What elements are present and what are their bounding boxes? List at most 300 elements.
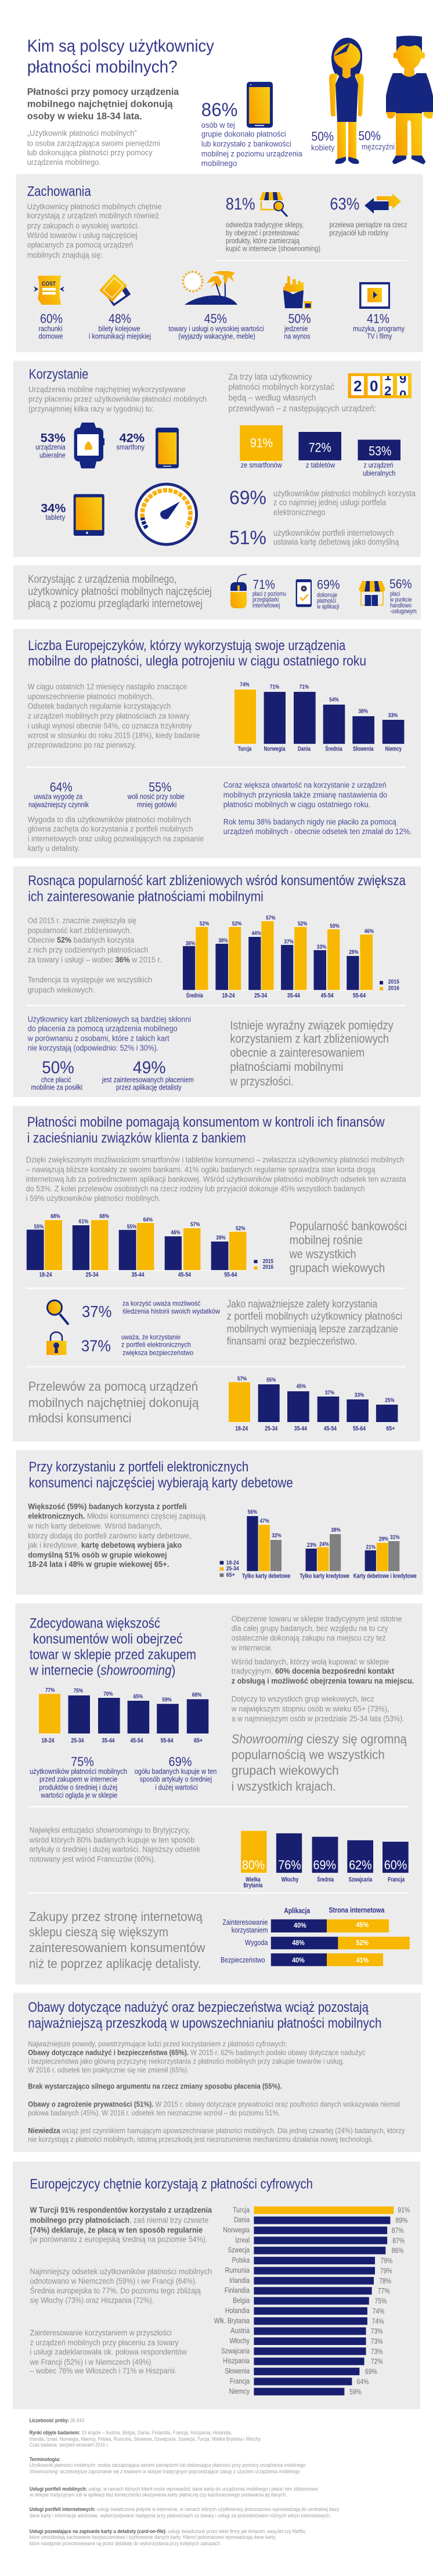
icon: year counter 2020: 0 xyxy=(370,377,378,395)
stat: 51 percent debit default: 51% xyxy=(229,526,266,548)
statement text: korzystaniem z kart zbliżeniowych xyxy=(230,1033,389,1046)
stat: in store 56 percent: 56% xyxy=(389,577,412,591)
chart: card types by age: 31% xyxy=(390,1534,400,1540)
chart: countries bar chart: 38% xyxy=(359,708,368,715)
body text: British enthusiasts: notowany jest wśród Francuzów (60%). xyxy=(30,1855,156,1863)
stat: 69 percent wallet users: elektronicznego xyxy=(273,508,326,518)
body text: lowest usage xyxy=(30,2267,212,2304)
chart: showrooming by country: Włochy xyxy=(282,1876,299,1883)
chart: showrooming by country xyxy=(241,1831,409,1889)
chart: horizontal bars by country: Holandia xyxy=(225,2306,250,2315)
stat: 69 percent xyxy=(135,1754,217,1791)
chart: countries bar chart: Słowenia xyxy=(353,745,374,752)
body text: devices used: (przynajmniej kilka razy w tygodniu) to: xyxy=(28,405,154,413)
stat: 75 percent: produktów o średniej i dużej xyxy=(39,1783,117,1791)
chart: horizontal bars by country: 73% xyxy=(371,2327,383,2336)
chart: horizontal bars by country: Hiszpania xyxy=(223,2357,250,2365)
stat: browser 71 percent xyxy=(252,578,286,609)
chart: contactless by age: 52% xyxy=(298,920,308,927)
stat: smartphones 42 percent: 42% xyxy=(120,432,145,445)
chart: horizontal bars by country: 74% xyxy=(373,2307,385,2315)
stat: 75 percent xyxy=(30,1754,127,1799)
stat: takeaway food: jedzenie xyxy=(284,324,308,333)
stat: 49 percent retailer app: przez aplikację detalisty xyxy=(116,1083,182,1091)
stat: wearables 53 percent: 53% xyxy=(41,432,66,445)
body text: lowest usage: się Włochy (73%) oraz Hiszpania (72%). xyxy=(30,2296,154,2304)
body text: którzy dodają do portfeli zarówno karty debetowe, xyxy=(28,1531,191,1540)
body text: convenience: i internetowych oraz usług pozwalających na zapisanie xyxy=(28,835,204,843)
body text xyxy=(28,917,161,994)
stat: convenience 64 percent: najważniejszy czynnik xyxy=(28,800,89,809)
footnotes: Showrooming: wcześniejsze zapoznanie się z towarem w sklepie tradycyjnym poprzedzające zakup z użyciem urządzenia mobilnego xyxy=(30,2469,300,2475)
chart: card types by age: 21% xyxy=(366,1543,376,1550)
body text: W 2016 r. odsetek ten praktycznie się nie zmienił (65%). xyxy=(28,2066,189,2074)
heading xyxy=(28,638,366,669)
intro text: urządzenia mobilnego. xyxy=(27,158,101,167)
chart: mobile banking by age: 55% xyxy=(127,1223,137,1230)
body text: Dzięki zwiększonym możliwościom smartfonów i tabletów konsumenci – zwłaszcza użytkownicy płatności mobilnych xyxy=(26,1156,404,1164)
stat: app 69 percent: dokonuje xyxy=(317,592,337,599)
stat: 86 percent: grupie dokonało płatności xyxy=(201,130,286,139)
heading: towar w sklepie przed zakupem xyxy=(30,1647,196,1662)
heading xyxy=(28,873,406,904)
body text: devices used: Urządzenia mobilne najchętniej wykorzystywane xyxy=(28,385,186,394)
statement text xyxy=(230,1019,394,1088)
chart: future device use xyxy=(240,425,400,477)
chart: mobile banking by age: 2016 xyxy=(263,1264,273,1271)
chart: app versus website: Wygoda xyxy=(245,1938,268,1947)
intro text: to osoba zarządzająca swoimi pieniędzmi xyxy=(27,139,160,147)
chart: mobile banking by age: 64% xyxy=(143,1216,153,1223)
chart: showrooming by age xyxy=(39,1687,208,1744)
statement text: w przyszłości. xyxy=(230,1075,294,1088)
chart: countries bar chart xyxy=(234,681,404,752)
statement text: młodsi konsumenci xyxy=(28,1411,131,1426)
stat: in store 56 percent: handlowo xyxy=(390,602,412,609)
heading: i zacieśnianiu związków klienta z bankiem xyxy=(27,1130,246,1146)
chart: horizontal bars by country: 72% xyxy=(371,2357,383,2366)
stat: smartphones 42 percent: smartfony xyxy=(116,443,145,452)
panel: Zachowania xyxy=(16,174,423,352)
icon: bill: COST xyxy=(42,281,56,287)
body text: dla całej grupy badanych, bez względu na to czy xyxy=(232,1624,388,1633)
footnotes: Terminologia: xyxy=(30,2456,60,2463)
body text: Odsetek badanych regularnie korzystających xyxy=(28,702,171,710)
body text: domyślną 51% osób w grupie wiekowej xyxy=(28,1551,167,1560)
body text: convenience: Wygoda to dla użytkowników płatności mobilnych xyxy=(28,815,191,824)
chart: card types by age: 18-24 xyxy=(226,1559,239,1566)
icon: smartphone xyxy=(156,428,179,468)
chart: horizontal bars by country: 78% xyxy=(379,2276,391,2285)
body text: Obawy dotyczące nadużyć i bezpieczeństwa (65%). W 2015 r. 62% badanych podało obawy dotyczące nadużyć xyxy=(28,2048,365,2057)
chart: showrooming by country: Wielka xyxy=(246,1876,261,1883)
stat: 69 percent: ogółu badanych kupuje w ten xyxy=(135,1767,217,1776)
statement text xyxy=(29,1909,205,1971)
chart: horizontal bars by country: Turcja xyxy=(233,2205,250,2214)
body text: attitude change: płatności mobilnych w ciągu ostatniego roku. xyxy=(223,800,370,809)
icon: year counter 2020: 0 xyxy=(399,388,406,402)
stat: app 69 percent: 69% xyxy=(317,578,340,592)
heading xyxy=(29,1615,196,1678)
statement text: mobilnej rośnie xyxy=(290,1233,363,1247)
stat: 69 percent wallet users: 69% xyxy=(229,486,266,508)
chart: transfers by age: 25% xyxy=(385,1397,395,1404)
stat: 63 percent transfers: 63% xyxy=(330,195,359,214)
icon: year counter 2020: 9 xyxy=(399,371,406,386)
stat: 63 percent transfers: przyjaciół lub rodziny xyxy=(329,229,389,237)
chart: showrooming by age: 77% xyxy=(45,1687,55,1694)
icon: year counter 2020: 2 xyxy=(384,384,391,398)
stat: women: kobiety xyxy=(311,143,335,152)
footnotes: Użytkownik płatności mobilnych: osoba zarządzająca swoimi pieniędzmi lub dokonująca płatności przy pomocy urządzenia mobilnego xyxy=(30,2462,305,2469)
body text: Obawy o zagrożenie prywatności (51%). W 2015 r. obawy dotyczące prywatności oraz poufności danych wskazywała niemal xyxy=(28,2100,400,2108)
intro text xyxy=(27,129,160,167)
panel: Europeans and digital payments xyxy=(13,2162,420,2409)
heading xyxy=(28,2000,381,2031)
chart: mobile banking by age: 61% xyxy=(79,1218,89,1225)
body text: za towary i usługi – wobec 36% w 2015 r. xyxy=(28,955,161,964)
chart: transfers by age: 35-44 xyxy=(294,1425,307,1432)
stat: in store 56 percent: płaci xyxy=(390,591,400,598)
stat: 81 percent showrooming xyxy=(226,195,320,253)
stat: 75 percent: wartości ogląda je w sklepie xyxy=(40,1791,117,1799)
body text: internetową lub za pośrednictwem aplikacji bankowej. Wśród użytkowników płatności mobilnych odsetek ten wzrasta xyxy=(26,1175,406,1184)
chart: countries bar chart: Niemcy xyxy=(385,745,402,752)
chart: contactless by age: 55-64 xyxy=(353,992,366,999)
body text: w nich karty debetowe. Wśród badanych, xyxy=(27,1522,162,1531)
title: płatności mobilnych? xyxy=(27,57,178,77)
statement text: mobilnych wymieniają lepsze zarządzanie xyxy=(227,1322,398,1334)
statement text: Showrooming cieszy się ogromną xyxy=(232,1731,407,1746)
chart: contactless by age: 33% xyxy=(317,943,327,950)
body text: convenience: karty u detalisty. xyxy=(28,844,80,853)
stat: men: mężczyźni xyxy=(362,143,395,151)
statement text: obecnie a zainteresowaniem xyxy=(230,1047,365,1060)
body text: Wśród badanych, którzy wolą kupować w sklepie xyxy=(232,1657,389,1666)
chart: horizontal bars by country: 74% xyxy=(372,2317,384,2325)
chart: card types by age: 47% xyxy=(260,1517,269,1524)
heading xyxy=(27,1114,385,1146)
chart: contactless by age: 37% xyxy=(284,938,294,945)
icon: bill xyxy=(34,276,64,305)
chart: horizontal bars by country: Słowenia xyxy=(225,2366,250,2375)
body text: Turkey: W Turcji 91% respondentów korzystało z urządzenia xyxy=(30,2206,212,2214)
chart: horizontal bars by country: 86% xyxy=(392,2246,404,2255)
icon: film xyxy=(359,282,390,309)
chart: showrooming by country: 62% xyxy=(349,1858,372,1873)
panel: intro who are Polish mobile payment users xyxy=(27,36,433,168)
chart: future device use: 53% xyxy=(369,444,391,459)
subheading: osoby w wieku 18-34 lata. xyxy=(27,111,142,122)
chart: transfers by age: 55-64 xyxy=(353,1425,366,1432)
body text: Obecnie 52% badanych korzysta xyxy=(28,936,135,944)
body text: upowszechnienie płatności mobilnych. xyxy=(28,692,154,701)
chart: showrooming by country: 60% xyxy=(384,1858,407,1873)
body text: – nawiązują bliższe kontakty ze swoimi bankami. 41% ogółu badanych regularnie sprawdza stan konta drogą xyxy=(26,1166,376,1174)
chart: countries bar chart: 33% xyxy=(388,712,398,719)
chart: app versus website: Aplikacja xyxy=(284,1906,311,1915)
body text: i usługi wynosi obecnie 54%, co oznacza trzykrotny xyxy=(28,721,192,730)
footnotes: Usługi pozwalające na zapisanie karty u detalisty (card-on-file): usługi świadczone przez takie firmy jak Amazon, easyJet czy Netflix, xyxy=(30,2528,306,2535)
body text: Najważniejsze powody, powstrzymujące ludzi przed korzystaniem z płatności cyfrowych: xyxy=(28,2040,287,2048)
chart: transfers by age: 33% xyxy=(355,1391,365,1398)
body text: lowest usage: Najmniejszy odsetek użytkowników płatności mobilnych xyxy=(30,2267,212,2276)
stat: holidays and furniture xyxy=(168,312,264,341)
stat: 81 percent showrooming: by obejrzeć i przetestować xyxy=(226,229,300,237)
chart: contactless by age xyxy=(183,914,399,999)
chart: horizontal bars by country: Dania xyxy=(234,2216,250,2224)
stat: 86 percent: lub korzystało z bankowości xyxy=(201,139,291,148)
chart: card types by age: 32% xyxy=(272,1532,282,1539)
chart: transfers by age: 25-34 xyxy=(265,1425,278,1432)
body text: three years forecast: przewidywań – z następujących urządzeń: xyxy=(229,405,376,414)
stat: 63 percent transfers: przelewa pieniądze na rzecz xyxy=(329,221,407,229)
chart: card types by age: 29% xyxy=(379,1535,389,1542)
chart: app versus website: Bezpieczeństwo xyxy=(221,1956,265,1964)
chart: showrooming by age: 59% xyxy=(162,1696,172,1703)
stat: 50 percent meals: 50% xyxy=(42,1058,74,1077)
chart: countries bar chart: 71% xyxy=(270,683,280,690)
stat: music, TV and films: 41% xyxy=(367,312,389,326)
icon: fries xyxy=(283,276,312,308)
stat: tickets xyxy=(89,312,151,341)
body text xyxy=(27,203,161,259)
stat: less cash 55 percent: woli nosić przy sobie xyxy=(127,792,185,801)
panel: Korzystanie xyxy=(13,361,421,557)
chart: app versus website: Zainteresowanie xyxy=(222,1918,268,1926)
body text: połowa badanych (45%). W 2016 r. odsetek ten nieznacznie wzrósł – do poziomu 51%. xyxy=(28,2109,280,2117)
stat: bills: 60% xyxy=(40,312,63,326)
body text: attitude change xyxy=(223,781,412,836)
body text: i 59% użytkowników płatności mobilnych. xyxy=(26,1194,161,1203)
stat: 86 percent: mobilnego xyxy=(201,159,237,168)
stat: 86 percent: osób w tej xyxy=(201,121,235,129)
chart: contactless by age: 2016 xyxy=(388,985,399,992)
chart: contactless by age: 52% xyxy=(200,920,210,927)
chart: horizontal bars by country: Francja xyxy=(230,2376,250,2385)
statement text: Korzystając z urządzenia mobilnego, xyxy=(28,573,176,586)
footnotes: w sklepie tradycyjnym lub w aplikacji bez konieczności okazywania karty płatniczej czy każdorazowego podawania jej danych. xyxy=(30,2492,287,2498)
statement text: płacą z poziomu przeglądarki internetowej xyxy=(28,598,203,610)
panel: fraud and security concerns xyxy=(13,1993,421,2152)
stat: less cash 55 percent xyxy=(127,780,185,809)
chart: showrooming by country: Brytania xyxy=(244,1882,263,1889)
body text: card users: do płacenia za pomocą urządzenia mobilnego xyxy=(28,1024,178,1033)
body text: British enthusiasts: artykuły o średniej i dużej wartości. Najniższy odsetek xyxy=(30,1845,200,1854)
stat: browser 71 percent: przeglądarki xyxy=(252,597,279,604)
chart: card types by age: 38% xyxy=(331,1527,341,1534)
icon: padlock xyxy=(46,1332,67,1355)
chart: horizontal bars by country xyxy=(214,2205,410,2396)
stat: security 37 percent xyxy=(81,1333,193,1356)
footnotes: Liczebność próby: 36 843 xyxy=(30,2418,84,2424)
stat: holidays and furniture: (wyjazdy wakacyjne, meble) xyxy=(178,332,255,341)
statement text: z portfeli mobilnych użytkownicy płatności xyxy=(227,1310,402,1322)
chart: showrooming by country: Średnia xyxy=(317,1875,334,1883)
stat: 50 percent meals: chce płacić xyxy=(41,1075,71,1084)
stat: wearables 53 percent: ubieralne xyxy=(39,451,66,460)
body text: lowest usage: Średnia europejska to 77%. Do poziomu tego zbliżają xyxy=(30,2286,201,2295)
body text: i bezpieczeństwa jako główną przyczynę niekorzystania z płatności mobilnych przy zakupie towarów i usług. xyxy=(28,2057,344,2065)
body text: z urządzeń mobilnych przy płatnościach za towary xyxy=(28,712,190,720)
stat: app 69 percent xyxy=(316,578,340,611)
chart: mobile banking by age: 2015 xyxy=(263,1258,273,1265)
chart: horizontal bars by country: 77% xyxy=(378,2286,390,2295)
stat: women xyxy=(311,129,335,152)
body text: Turkey: mobilnego przy płatnościach, zaś niemal trzy czwarte xyxy=(30,2216,208,2224)
chart: horizontal bars by country: Izreal xyxy=(235,2235,250,2244)
stat: women: 50% xyxy=(311,129,334,144)
footnotes: które następnie przechowywane są przez detalistę do wykorzystania przy kolejnych zakupach. xyxy=(30,2541,221,2547)
body text: devices used xyxy=(28,385,207,413)
heading: najważniejszą przeszkodą w upowszechnianiu płatności mobilnych xyxy=(28,2015,381,2031)
statement text: mobilnych najchętniej dokonują xyxy=(28,1395,199,1410)
intro text: lub dokonująca płatności przy pomocy xyxy=(27,149,153,157)
stat: tracking spending 37 percent xyxy=(82,1299,220,1321)
stat: 49 percent retailer app: 49% xyxy=(133,1058,166,1077)
body text: Brak wystarczająco silnego argumentu na rzecz zmiany sposobu płacenia (55%). xyxy=(28,2082,282,2090)
statement text xyxy=(289,1220,407,1275)
stat: security 37 percent: uważa, że korzystanie xyxy=(121,1333,181,1341)
chart: future device use: 72% xyxy=(309,440,331,454)
statement text xyxy=(227,1297,402,1347)
chart: horizontal bars by country: 87% xyxy=(392,2226,404,2235)
chart: horizontal bars by country: 87% xyxy=(392,2236,405,2245)
icon: year counter 2020 xyxy=(348,373,412,398)
stat: convenience 64 percent: 64% xyxy=(50,780,73,794)
stat: 75 percent: 75% xyxy=(71,1754,94,1769)
body text: British enthusiasts xyxy=(29,1825,200,1863)
stat: security 37 percent: 37% xyxy=(81,1337,111,1355)
stat: 75 percent: przed zakupem w internecie xyxy=(39,1774,117,1783)
stat: tablets 34 percent xyxy=(41,502,66,522)
stat: security 37 percent: zwiększa bezpieczeństwo xyxy=(122,1348,193,1356)
body text: Turkey xyxy=(30,2206,212,2243)
heading: Europejczycy chętnie korzystają z płatności cyfrowych xyxy=(30,2177,313,2192)
chart: horizontal bars by country: Irlandia xyxy=(229,2276,250,2285)
chart: showrooming by country: 80% xyxy=(242,1858,265,1873)
chart: horizontal bars by country: Włochy xyxy=(229,2336,250,2345)
statement text: popularnością we wszystkich xyxy=(232,1747,385,1762)
chart: app versus website: 48% xyxy=(292,1939,305,1947)
body text: grupach wiekowych. xyxy=(28,986,95,994)
stat: 81 percent showrooming: 81% xyxy=(226,195,255,214)
chart: mobile banking by age: 68% xyxy=(50,1213,60,1220)
body text xyxy=(26,1156,406,1203)
chart: contactless by age: 38% xyxy=(218,937,228,944)
body text: card users: Użytkownicy kart zbliżeniowych są bardziej skłonni xyxy=(28,1015,191,1024)
stat: browser 71 percent: 71% xyxy=(252,578,275,592)
chart: showrooming by age: 70% xyxy=(103,1690,113,1697)
icon: phone with check xyxy=(296,579,312,607)
chart: countries bar chart: Dania xyxy=(298,745,311,752)
footnotes: dane karty i informacje adresowe, wykorzystywane następnie przy płatnościach za towary i usługi za pośrednictwem różnych witryn internetowych. xyxy=(30,2513,331,2519)
subheading xyxy=(27,86,179,122)
body text: W ciągu ostatnich 12 miesięcy nastąpiło znaczące xyxy=(28,683,187,691)
chart: contactless by age: 44% xyxy=(252,930,261,937)
stat: smartphones 42 percent xyxy=(116,432,145,452)
chart: mobile banking by age: 46% xyxy=(171,1229,181,1236)
chart: showrooming by age: 25-34 xyxy=(71,1737,84,1744)
chart: countries bar chart: 71% xyxy=(300,683,309,690)
chart: contactless by age: 57% xyxy=(266,914,276,921)
body text: do 53%. Z kolei przelewów osobistych na rzecz rodziny lub przyjaciół dokonuje 45% wszystkich badanych xyxy=(26,1185,365,1193)
chart: app versus website: 41% xyxy=(356,1956,369,1964)
chart: mobile banking by age: 35-44 xyxy=(131,1271,145,1278)
chart: showrooming by age: 55-64 xyxy=(161,1737,174,1744)
chart: horizontal bars by country: 64% xyxy=(357,2377,369,2386)
stat: 50 percent meals: mobilnie za posiłki xyxy=(31,1083,82,1091)
icon: tickets xyxy=(99,274,131,306)
stat: tickets: bilety kolejowe xyxy=(99,324,140,333)
icon: man xyxy=(386,36,433,164)
body text: Tendencja ta występuje we wszystkich xyxy=(28,976,152,984)
chart: card types by age: Tylko karty debetowe xyxy=(242,1572,290,1579)
stat: 81 percent showrooming: kupić w internecie (showrooming) xyxy=(226,244,320,253)
chart: horizontal bars by country: Rumunia xyxy=(225,2266,250,2274)
stat: tracking spending 37 percent: śledzenia historii swoich wydatków xyxy=(122,1307,220,1315)
chart: showrooming by age: 65% xyxy=(133,1693,143,1700)
chart: card types by age: 25-34 xyxy=(226,1565,239,1572)
footnotes: które umożliwiają zachowanie bezpieczeństwa i szyfrowanie danych karty. Klienci jednorazowo wprowadzają dane karty, xyxy=(30,2534,276,2541)
chart: contactless by age: 52% xyxy=(232,920,242,927)
statement text: niż te poprzez aplikację detalisty. xyxy=(29,1957,201,1971)
stat: 81 percent showrooming: odwiedza tradycyjne sklepy, xyxy=(226,221,304,229)
chart: mobile banking by age xyxy=(27,1213,273,1278)
heading: Przy korzystaniu z portfeli elektronicznych xyxy=(29,1459,248,1475)
chart: card types by age xyxy=(220,1509,417,1579)
chart: countries bar chart: Turcja xyxy=(238,745,252,752)
body text: Niewiedza wciąż jest czynnikiem hamującym upowszechnianie płatności mobilnych. Dla jednej czwartej (24%) badanych, którzy xyxy=(28,2127,405,2135)
body text: z nich przy codziennych płatnościach xyxy=(28,946,148,954)
icon: smartwatch xyxy=(74,423,104,468)
body text: Turkey: (w porównaniu z europejską średnią na poziomie 54%). xyxy=(30,2235,207,2243)
stat: holidays and furniture: towary i usługi o wysokiej wartości xyxy=(168,324,264,333)
stat: holidays and furniture: 45% xyxy=(204,312,227,326)
chart: horizontal bars by country: Polska xyxy=(232,2256,250,2264)
stat: less cash 55 percent: 55% xyxy=(149,780,171,794)
body text: elektronicznych. Młodsi konsumenci częściej zapisują xyxy=(28,1512,206,1521)
chart: contactless by age: 36% xyxy=(186,940,196,947)
chart: app versus website: 52% xyxy=(356,1939,369,1947)
body text: 18-24 lata i 48% w grupie wiekowej 65+. xyxy=(28,1560,169,1569)
chart: horizontal bars by country: 89% xyxy=(396,2216,408,2225)
chart: horizontal bars by country: 79% xyxy=(381,2256,393,2265)
body text: three years forecast xyxy=(229,373,376,414)
body text: three years forecast: płatności mobilnych korzystać xyxy=(229,383,334,392)
body text: Użytkownicy płatności mobilnych chętnie xyxy=(27,203,161,211)
chart: mobile banking by age: 39% xyxy=(216,1234,226,1241)
heading: Liczba Europejczyków, którzy wykorzystują swoje urządzenia xyxy=(28,638,346,654)
statement text xyxy=(28,1379,199,1426)
chart: contactless by age: Średnia xyxy=(186,991,203,999)
body text: card users xyxy=(27,1015,191,1052)
chart: transfers by age: 55% xyxy=(266,1376,276,1383)
stat: 69 percent wallet users xyxy=(229,486,416,518)
footnotes: Irlandia, Izrael, Norwegia, Niemcy, Polska, Rumunia, Słowenia, Szwajcaria, Szwecja, Turcja, Wielka Brytania i Włochy. xyxy=(30,2436,261,2442)
stat: 69 percent wallet users: użytkowników płatności mobilnych korzysta xyxy=(273,489,416,499)
chart: showrooming by country: 76% xyxy=(278,1858,301,1873)
icon: shop xyxy=(359,581,385,606)
heading: w internecie (showrooming) xyxy=(29,1662,175,1678)
body text: card users: w porównaniu z osobami, które z takich kart xyxy=(27,1034,169,1043)
chart: horizontal bars by country: 73% xyxy=(371,2347,383,2355)
body text: Turkey: (74%) deklaruje, że płacą w ten sposób regularnie xyxy=(30,2225,203,2234)
stat: bills: rachunki xyxy=(38,324,63,333)
chart: contactless by age: 2015 xyxy=(388,979,399,986)
body text: three years forecast: będą – według własnych xyxy=(229,394,316,403)
stat: in store 56 percent: w punkcie xyxy=(389,597,412,604)
